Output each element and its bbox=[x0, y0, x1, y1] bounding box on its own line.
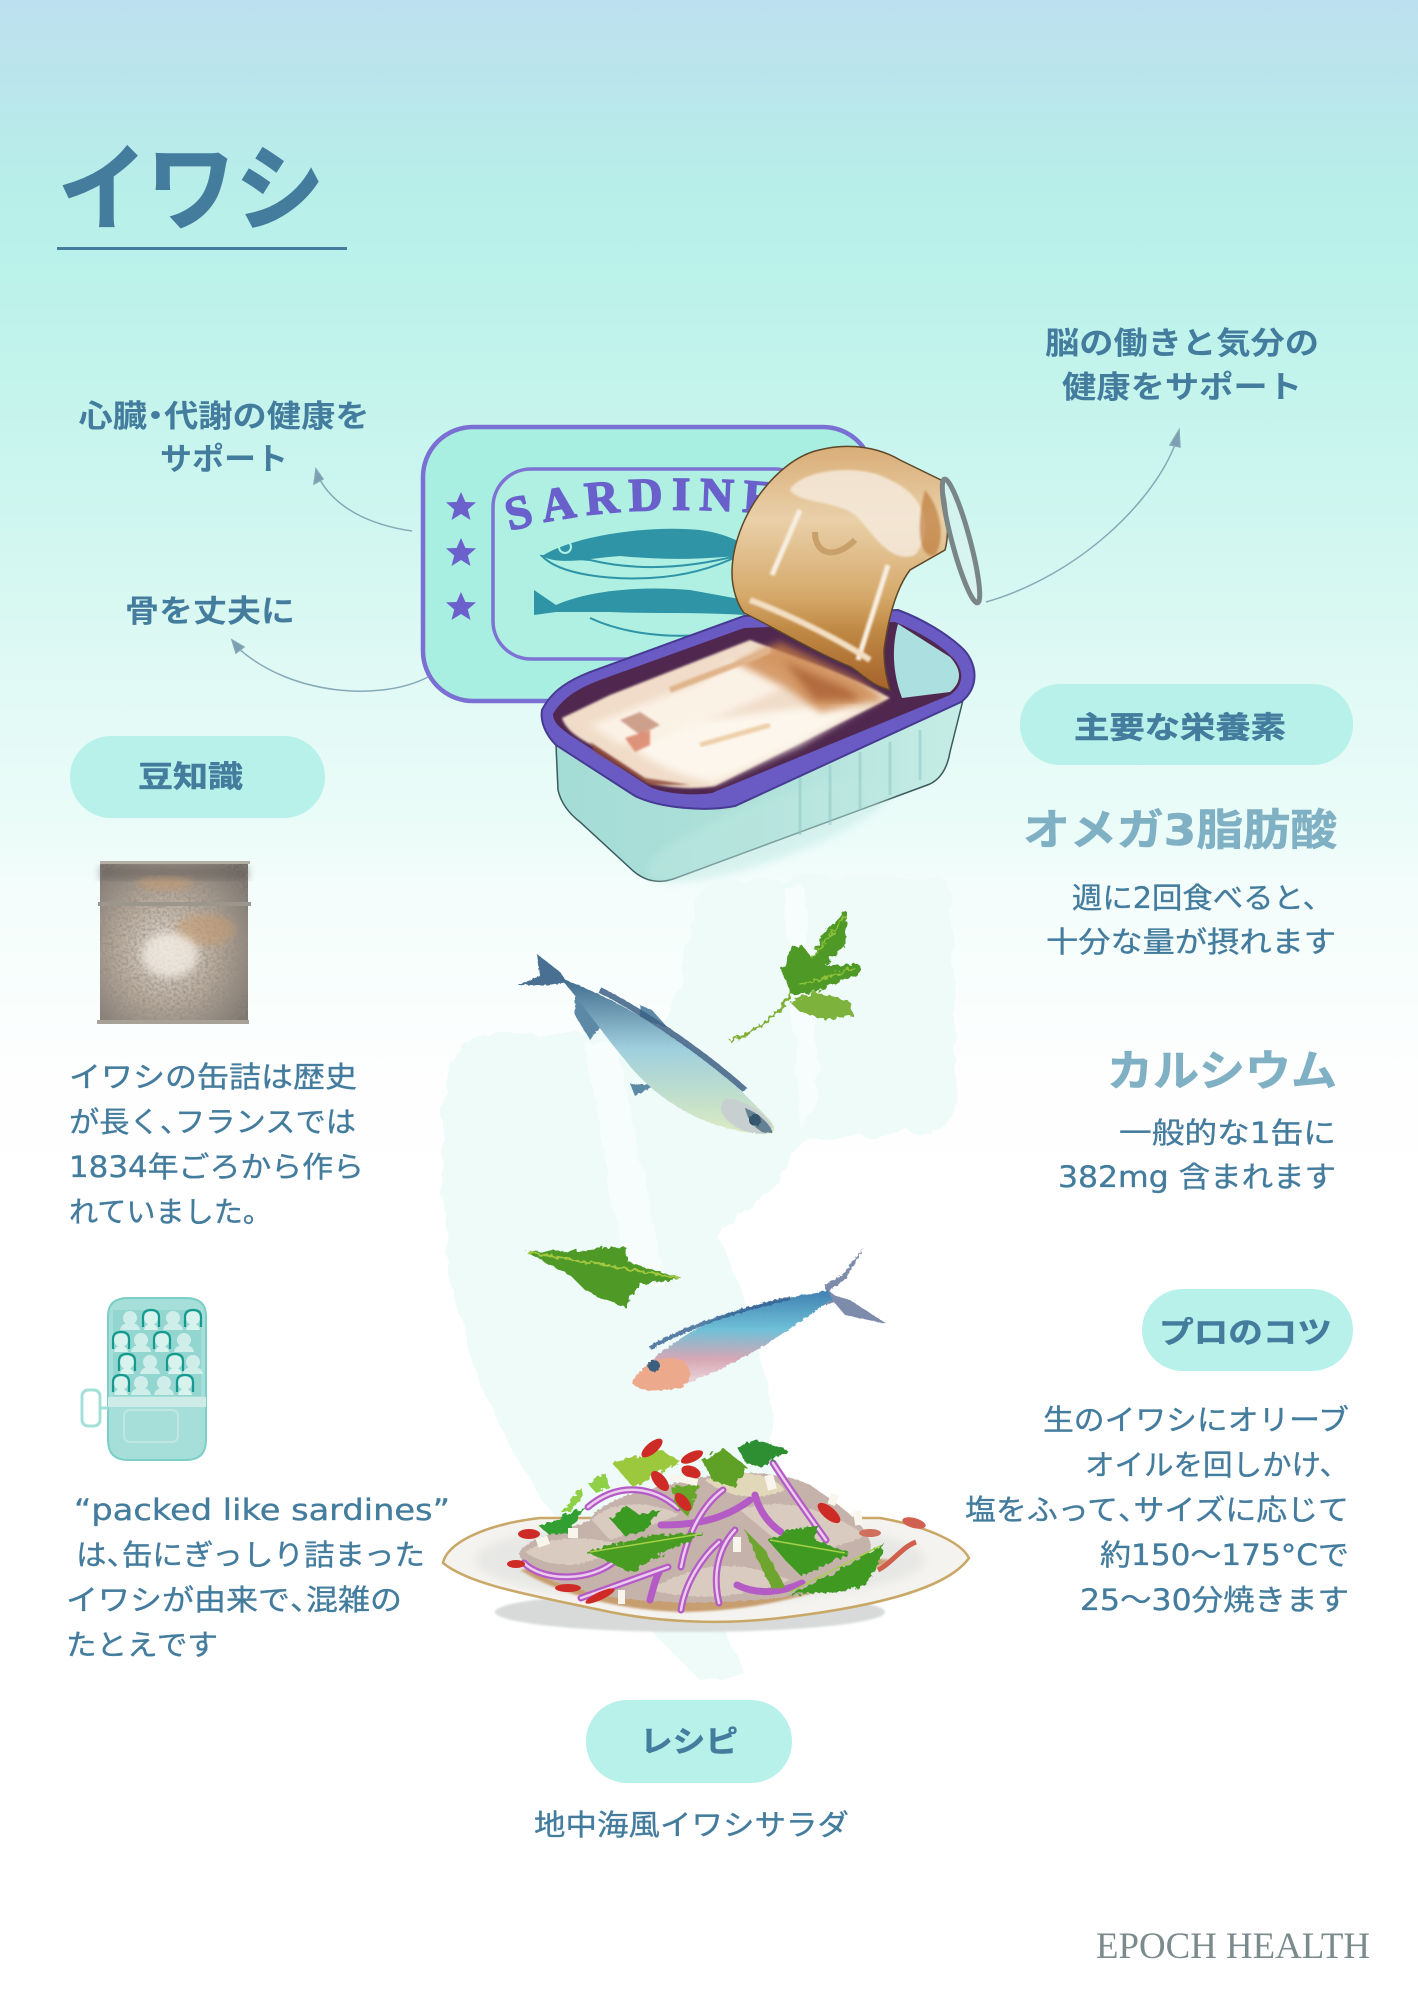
nutrient: calcium: 382mg 含まれます bbox=[1058, 1160, 1336, 1194]
callout: heart and metabolism: 心臓・代謝の健康を bbox=[78, 391, 370, 436]
title: イワシ bbox=[58, 114, 324, 250]
text: pro tips: 25～30分焼きます bbox=[1080, 1583, 1349, 1617]
text: pro tips: 生のイワシにオリーブ bbox=[1043, 1403, 1349, 1437]
text: packed like sardines: は、缶にぎっしり詰まった bbox=[76, 1538, 425, 1572]
illustration: open can bbox=[542, 610, 975, 903]
text: tin history: イワシの缶詰は歴史 bbox=[69, 1060, 357, 1094]
nutrient: omega-3 bbox=[1023, 806, 1337, 959]
pill: pro tips bbox=[1142, 1289, 1353, 1371]
illustration: sardine tin lid bbox=[420, 424, 866, 704]
callout: bones: 骨を丈夫に bbox=[125, 586, 295, 631]
text: tin history: 1834年ごろから作ら bbox=[69, 1150, 364, 1184]
callout: brain and mood: 健康をサポート bbox=[1062, 362, 1302, 407]
callout: brain and mood: 脳の働きと気分の bbox=[1045, 318, 1319, 363]
pill: pro tips: プロのコツ bbox=[1159, 1308, 1332, 1352]
text: tin history: れていました。 bbox=[69, 1195, 272, 1229]
nutrient: omega-3: 週に2回食べると、 bbox=[1072, 881, 1333, 915]
text: packed like sardines: たとえです bbox=[66, 1628, 218, 1662]
arrow: heart bbox=[314, 469, 412, 531]
illustration: peeled lid bbox=[732, 446, 986, 690]
text: pro tips: 塩をふって 、サイズに応じて bbox=[965, 1493, 1349, 1527]
pill: trivia: 豆知識 bbox=[138, 752, 243, 796]
text: packed like sardines bbox=[66, 1493, 450, 1662]
text: pro tips bbox=[965, 1403, 1349, 1617]
icon: packed can with people bbox=[82, 1298, 206, 1460]
pill: recipe bbox=[586, 1700, 792, 1783]
illustration: salad plate bbox=[443, 1435, 969, 1632]
nutrient: calcium: 一般的な1缶に bbox=[1119, 1116, 1336, 1150]
text: recipe name: 地中海風イワシサラダ bbox=[534, 1808, 849, 1842]
arrow: bones bbox=[232, 640, 428, 691]
callout: heart and metabolism: サポート bbox=[160, 434, 288, 479]
arrow: brain bbox=[986, 430, 1180, 602]
background brush strokes bbox=[442, 878, 956, 1680]
nutrient: omega-3: 十分な量が摂れます bbox=[1046, 925, 1336, 959]
illustration: sardine 2 bbox=[632, 1247, 887, 1391]
illustration: parsley sprig 1 bbox=[730, 910, 860, 1041]
illustration: sardine 1 bbox=[517, 954, 774, 1134]
pill: recipe: レシピ bbox=[640, 1717, 738, 1761]
pill: nutrients bbox=[1020, 684, 1353, 765]
nutrient: calcium bbox=[1058, 1047, 1337, 1194]
text: pro tips: 約150～175°Cで bbox=[1100, 1538, 1349, 1572]
pill: nutrients: 主要な栄養素 bbox=[1074, 703, 1286, 747]
nutrient: omega-3: オメガ3脂肪酸 bbox=[1023, 806, 1337, 856]
text: packed like sardines: “packed like sardines” bbox=[74, 1493, 450, 1527]
text: pro tips: オイルを回しかけ、 bbox=[1085, 1448, 1349, 1482]
callout: brain and mood bbox=[1045, 318, 1319, 407]
illustration: parsley leaf 2 bbox=[526, 1246, 682, 1307]
illustration: sardine tin lid: SARDINES bbox=[506, 478, 769, 530]
nutrient: calcium: カルシウム bbox=[1107, 1047, 1337, 1097]
logo: Epoch Health: EPOCH HEALTH bbox=[1096, 1926, 1370, 1967]
pill: trivia bbox=[70, 736, 325, 818]
icon: old tin bbox=[97, 861, 251, 1024]
text: packed like sardines: イワシが由来で 、混雑の bbox=[66, 1583, 402, 1617]
text: tin history bbox=[69, 1060, 364, 1229]
text: tin history: が長く、フランスでは bbox=[69, 1105, 356, 1139]
callout: heart and metabolism bbox=[78, 391, 370, 479]
